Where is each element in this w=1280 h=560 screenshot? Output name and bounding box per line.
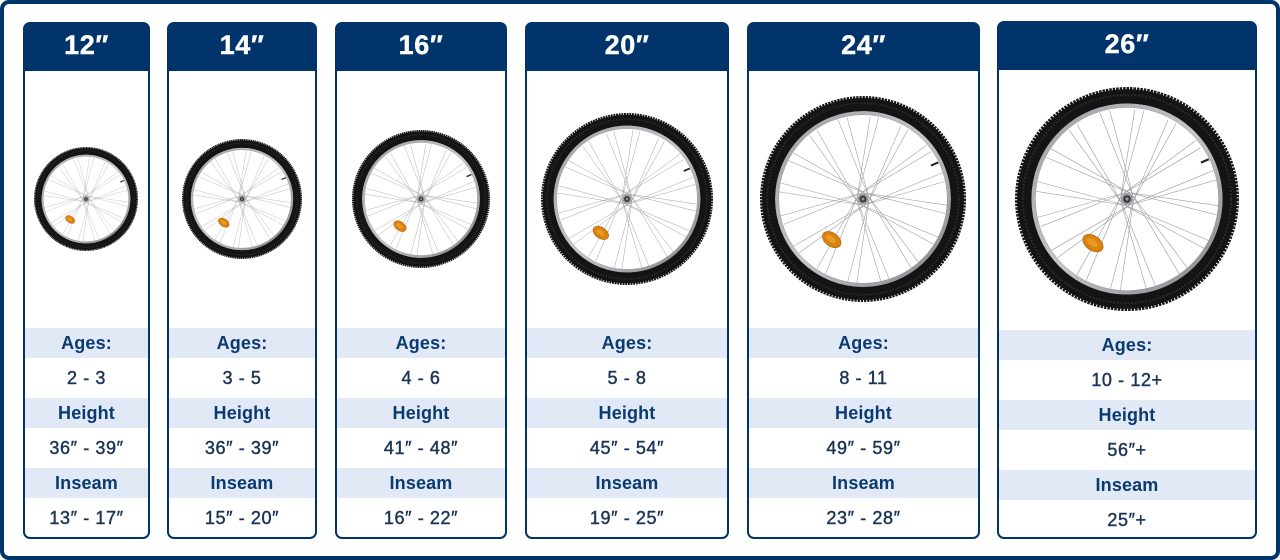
- label: inseam: Inseam: [390, 472, 452, 492]
- label: ages: [749, 328, 978, 358]
- value: ages: 10 - 12+: [1091, 370, 1163, 390]
- label: ages: [527, 328, 727, 358]
- label: height: Height: [835, 402, 892, 422]
- value: height: 56″+: [1107, 440, 1147, 460]
- label: ages: Ages:: [602, 332, 652, 352]
- value: ages: 8 - 11: [839, 368, 888, 388]
- heading: 12 inch: 12″: [64, 30, 109, 60]
- heading: 12 inch: [25, 24, 148, 70]
- label: height: Height: [58, 402, 115, 422]
- wheel: 14 inch: [182, 139, 302, 259]
- label: ages: Ages:: [838, 332, 889, 352]
- panel: 16 inch: [335, 22, 507, 538]
- label: height: [999, 400, 1255, 430]
- panel: 24 inch: [747, 22, 980, 538]
- panel: 20 inch: [525, 22, 729, 538]
- label: inseam: [25, 468, 148, 498]
- label: height: [527, 398, 727, 428]
- label: inseam: Inseam: [832, 472, 895, 492]
- label: height: Height: [214, 402, 270, 422]
- wheel: 20 inch: [541, 113, 713, 285]
- panel: 26 inch: [997, 21, 1257, 539]
- value: ages: 2 - 3: [67, 368, 106, 388]
- heading: 20 inch: 20″: [605, 30, 649, 60]
- label: inseam: [337, 468, 505, 498]
- heading: 26 inch: 26″: [1105, 29, 1149, 59]
- label: inseam: [999, 470, 1255, 500]
- heading: 14 inch: 14″: [220, 30, 264, 60]
- value: height: 41″ - 48″: [384, 438, 458, 458]
- label: height: Height: [393, 402, 449, 422]
- wheel: 26 inch: [1015, 87, 1239, 311]
- value: inseam: 25″+: [1107, 510, 1147, 530]
- value: inseam: 15″ - 20″: [205, 508, 279, 528]
- wheel: 16 inch: [352, 130, 490, 268]
- heading: 26 inch: [999, 23, 1255, 70]
- value: height: 45″ - 54″: [590, 438, 664, 458]
- panel: 14 inch: [167, 22, 317, 538]
- label: inseam: Inseam: [1096, 474, 1158, 494]
- value: height: 49″ - 59″: [826, 438, 901, 458]
- label: inseam: Inseam: [596, 472, 658, 492]
- heading: 16 inch: 16″: [399, 30, 443, 60]
- label: height: Height: [1099, 404, 1155, 424]
- label: inseam: [527, 468, 727, 498]
- wheel: 12 inch: [34, 147, 138, 251]
- label: inseam: [169, 468, 315, 498]
- value: ages: 3 - 5: [222, 368, 262, 388]
- heading: 14 inch: [169, 24, 315, 70]
- value: inseam: 13″ - 17″: [49, 508, 124, 528]
- value: height: 36″ - 39″: [49, 438, 124, 458]
- heading: 24 inch: 24″: [841, 30, 886, 60]
- value: inseam: 23″ - 28″: [826, 508, 901, 528]
- label: ages: [25, 328, 148, 358]
- panel: 12 inch: [23, 22, 150, 538]
- value: inseam: 16″ - 22″: [384, 508, 458, 528]
- value: inseam: 19″ - 25″: [590, 508, 664, 528]
- label: ages: Ages:: [396, 332, 446, 352]
- label: inseam: Inseam: [55, 472, 118, 492]
- label: ages: [337, 328, 505, 358]
- label: height: [337, 398, 505, 428]
- wheel: 24 inch: [760, 96, 966, 302]
- label: height: [169, 398, 315, 428]
- label: ages: Ages:: [61, 332, 112, 352]
- value: height: 36″ - 39″: [205, 438, 279, 458]
- label: ages: Ages:: [1102, 334, 1152, 354]
- value: ages: 5 - 8: [607, 368, 647, 388]
- heading: 16 inch: [337, 24, 505, 70]
- heading: 24 inch: [749, 24, 978, 70]
- label: inseam: Inseam: [211, 472, 273, 492]
- label: ages: Ages:: [217, 332, 267, 352]
- label: height: [25, 398, 148, 428]
- label: height: [749, 398, 978, 428]
- heading: 20 inch: [527, 24, 727, 70]
- label: ages: [169, 328, 315, 358]
- label: height: Height: [599, 402, 655, 422]
- value: ages: 4 - 6: [401, 368, 441, 388]
- label: inseam: [749, 468, 978, 498]
- label: ages: [999, 330, 1255, 360]
